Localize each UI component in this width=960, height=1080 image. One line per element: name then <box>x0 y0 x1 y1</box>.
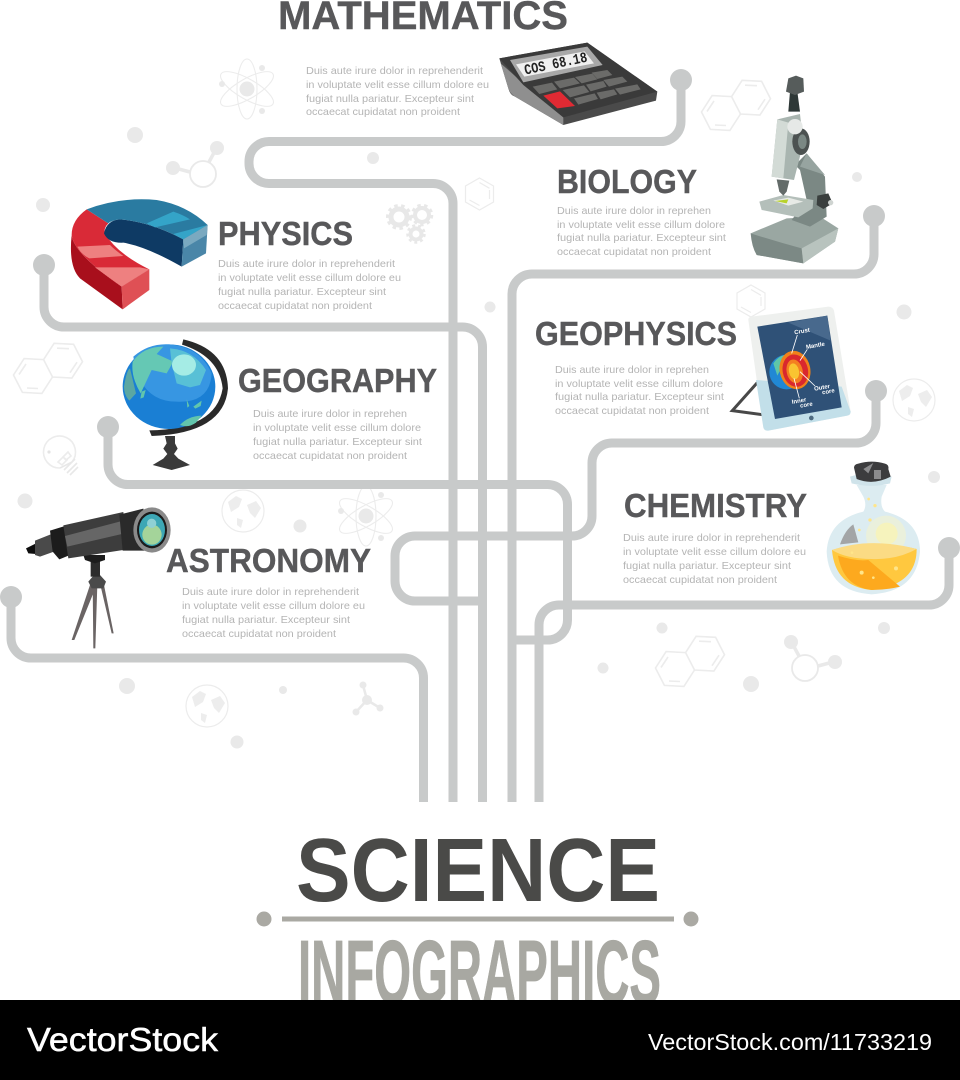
connector lines <box>0 69 960 802</box>
footer brand: VectorStock <box>27 1021 219 1058</box>
body text <box>555 364 724 417</box>
icon: tablet with earth layers: Inner <box>791 397 808 406</box>
icon: tablet with earth layers: Mantle <box>806 342 826 351</box>
icon: tablet with earth layers <box>732 307 851 431</box>
icon: tablet with earth layers: Crust <box>794 328 810 336</box>
body text: in voluptate velit esse cillum dolore <box>253 422 421 434</box>
line: astronomy <box>11 597 424 802</box>
body text: fugiat nulla pariatur. Excepteur sint <box>306 93 474 105</box>
end dots <box>0 69 960 608</box>
body text <box>182 586 365 640</box>
section: astronomy <box>26 507 371 648</box>
heading: ASTRONOMY <box>166 542 371 579</box>
heading: CHEMISTRY <box>624 487 807 524</box>
icon: telescope <box>26 507 171 648</box>
body text <box>253 408 422 462</box>
body text: in voluptate velit esse cillum dolore eu <box>306 79 489 91</box>
footer url: VectorStock.com/11733219 <box>648 1029 932 1055</box>
section: geography <box>123 339 437 470</box>
body text: occaecat cupidatat non proident <box>182 628 336 640</box>
body text: occaecat cupidatat non proident <box>623 574 777 586</box>
line: physics <box>44 265 482 802</box>
body text: occaecat cupidatat non proident <box>218 300 372 312</box>
body text: in voluptate velit esse cillum dolore eu <box>218 272 401 284</box>
title: science: SCIENCE <box>296 821 660 921</box>
heading: PHYSICS <box>218 215 353 252</box>
body text: Duis aute irure dolor in reprehenderit <box>623 532 800 544</box>
heading: GEOGRAPHY <box>238 362 437 399</box>
body text: in voluptate velit esse cillum dolore <box>555 378 723 390</box>
body text: occaecat cupidatat non proident <box>306 106 460 118</box>
line: geography <box>108 427 568 640</box>
body text <box>306 65 489 118</box>
body text: fugiat nulla pariatur. Excepteur sint <box>557 232 726 244</box>
icon: tablet with earth layers: core <box>800 402 814 410</box>
heading: BIOLOGY <box>557 163 697 200</box>
line: biology <box>512 216 874 802</box>
body text: occaecat cupidatat non proident <box>557 246 711 258</box>
body text: in voluptate velit esse cillum dolore eu <box>623 546 806 558</box>
section: chemistry <box>623 462 920 594</box>
icon: flask <box>827 462 920 594</box>
icon: tablet with earth layers: core <box>822 388 836 396</box>
body text: fugiat nulla pariatur. Excepteur sint <box>182 614 350 626</box>
body text: in voluptate velit esse cillum dolore <box>557 219 725 231</box>
body text: Duis aute irure dolor in reprehenderit <box>306 65 483 77</box>
body text: fugiat nulla pariatur. Excepteur sint <box>623 560 791 572</box>
body text: fugiat nulla pariatur. Excepteur sint <box>218 286 386 298</box>
body text: occaecat cupidatat non proident <box>555 405 709 417</box>
body text: in voluptate velit esse cillum dolore eu <box>182 600 365 612</box>
body text <box>218 258 401 312</box>
body text <box>623 532 806 586</box>
body text: fugiat nulla pariatur. Excepteur sint <box>555 391 724 403</box>
footer bar <box>0 1000 960 1080</box>
section: physics <box>71 199 401 312</box>
icon: horseshoe magnet <box>71 199 208 309</box>
body text: Duis aute irure dolor in reprehen <box>555 364 709 376</box>
body text: Duis aute irure dolor in reprehen <box>253 408 407 420</box>
heading: GEOPHYSICS <box>535 315 737 352</box>
line: chemistry <box>539 548 949 802</box>
section: mathematics <box>278 0 657 125</box>
icon: calculator: COS 68.18 <box>523 51 589 80</box>
body text <box>557 205 726 258</box>
icon: tablet with earth layers: Outer <box>814 384 831 393</box>
section: biology <box>557 76 838 263</box>
line: geophysics <box>395 391 876 601</box>
title divider with end dots <box>256 912 698 926</box>
body text: Duis aute irure dolor in reprehenderit <box>182 586 359 598</box>
decorative background icons <box>14 59 940 748</box>
icon: microscope <box>751 76 838 263</box>
body text: Duis aute irure dolor in reprehenderit <box>218 258 395 270</box>
body text: Duis aute irure dolor in reprehen <box>557 205 711 217</box>
line: mathematics <box>249 80 681 802</box>
icon: calculator <box>499 43 657 125</box>
section: geophysics <box>535 307 851 431</box>
body text: fugiat nulla pariatur. Excepteur sint <box>253 436 422 448</box>
icon: globe <box>123 339 228 470</box>
body text: occaecat cupidatat non proident <box>253 450 407 462</box>
